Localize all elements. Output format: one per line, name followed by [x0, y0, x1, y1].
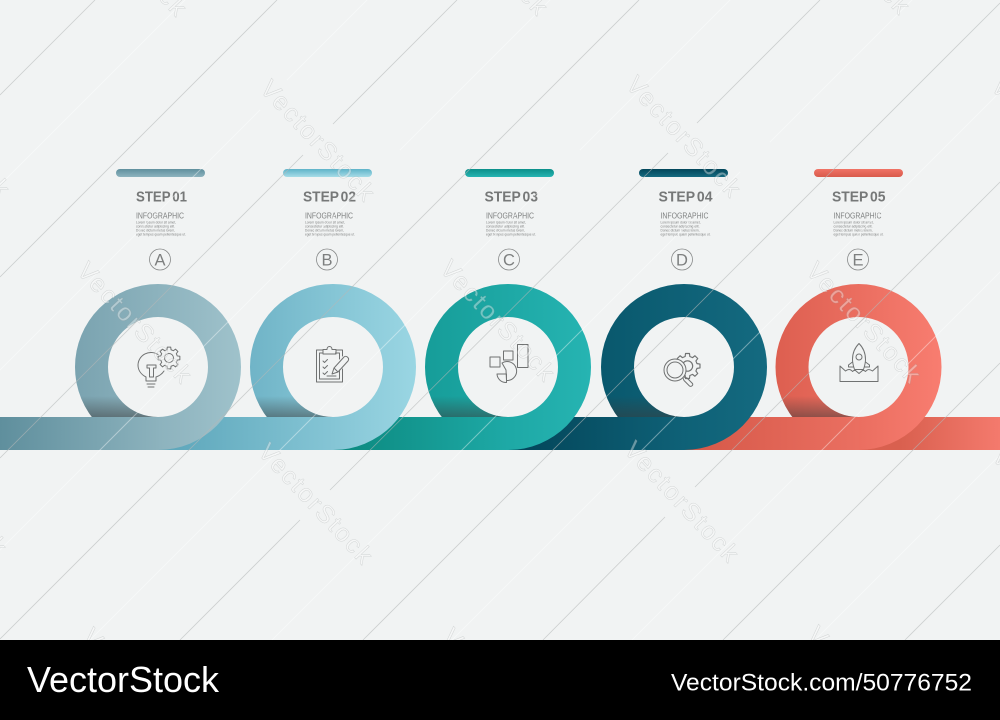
step 4 description: Lorem ipsum dolor sit amet,	[660, 220, 700, 224]
step 5 description	[834, 212, 884, 236]
step 1 description: consectetur adipiscing elit.	[136, 224, 175, 228]
footer bar	[0, 640, 1000, 720]
watermarks: VectorStock	[619, 436, 744, 568]
step 3 description: Donec dictum metus lorem,	[486, 228, 525, 232]
step 3 description: Lorem ipsum dolor sit amet,	[486, 220, 526, 224]
step 2 description: Lorem ipsum dolor sit amet,	[305, 220, 345, 224]
step 2 title: STEP 02	[303, 188, 356, 206]
icon: light bulb with gear	[138, 347, 180, 387]
step 1 ribbon and ring	[0, 284, 241, 450]
icon: rocket launch	[840, 344, 878, 382]
step 2 description: Donec dictum metus lorem,	[305, 228, 344, 232]
step 2 description: consectetur adipiscing elit.	[305, 224, 344, 228]
step 3 description	[486, 212, 536, 236]
step 1 description: Lorem ipsum dolor sit amet,	[136, 220, 176, 224]
color bar 5	[814, 169, 903, 177]
letter badge D: D	[676, 252, 688, 270]
icon: charts	[490, 344, 528, 383]
step 2 header	[283, 169, 372, 270]
step 1 description: Donec dictum metus lorem,	[136, 228, 175, 232]
step 1 title: STEP 01	[136, 188, 187, 206]
step 4 description: INFOGRAPHIC	[660, 212, 709, 220]
letter badge E: E	[852, 252, 864, 270]
color bar 1	[116, 169, 205, 177]
watermarks: VectorStock	[435, 255, 560, 387]
step 4 header	[639, 169, 728, 270]
step 3 title: STEP 03	[484, 188, 538, 206]
step 1 description: eget tempus quam pellentesque ut.	[136, 232, 186, 236]
step 4 description	[660, 212, 710, 236]
color bar 2	[283, 169, 372, 177]
step 3 ribbon and ring	[333, 284, 591, 450]
step 1 description	[136, 212, 186, 236]
footer brand: VectorStock	[27, 659, 220, 700]
step 5 description: Donec dictum metus lorem,	[834, 228, 872, 232]
step 2 description: eget tempus quam pellentesque ut.	[305, 232, 355, 236]
step 4 ribbon and ring	[508, 284, 767, 450]
step 5 ribbon and ring	[684, 284, 1000, 450]
step 3 description: consectetur adipiscing elit.	[486, 224, 525, 228]
watermarks: VectorStock	[253, 438, 378, 570]
step 3 description: eget tempus quam pellentesque ut.	[486, 232, 536, 236]
step 5 description: INFOGRAPHIC	[834, 212, 882, 220]
step 4 description: Donec dictum metus lorem,	[660, 228, 700, 232]
letter badge B: B	[321, 252, 333, 270]
letter badge A: A	[154, 252, 166, 270]
watermarks: VectorStock	[72, 257, 197, 389]
watermarks: VectorStock	[801, 257, 926, 389]
watermarks: VectorStock	[255, 75, 380, 207]
step 4 title: STEP 04	[658, 188, 713, 206]
step 4 description: consectetur adipiscing elit.	[660, 224, 700, 228]
watermarks: VectorStock	[621, 71, 746, 203]
footer image id: VectorStock.com/50776752	[671, 670, 972, 696]
step 1 header	[116, 169, 205, 270]
color bar 4	[639, 169, 728, 177]
step 2 description: INFOGRAPHIC	[305, 212, 353, 220]
step 3 description: INFOGRAPHIC	[486, 212, 534, 220]
step 5 description: Lorem ipsum dolor sit amet,	[834, 220, 874, 224]
icon: clipboard with pen	[316, 346, 349, 382]
step 4 description: eget tempus quam pellentesque ut.	[660, 232, 710, 236]
step 5 description: consectetur adipiscing elit.	[834, 224, 872, 228]
step 5 description: eget tempus quam pellentesque ut.	[834, 232, 884, 236]
color bar 3	[465, 169, 554, 177]
icon: magnifier with gear	[664, 354, 700, 386]
letter badge C: C	[503, 252, 515, 270]
step 1 description: INFOGRAPHIC	[136, 212, 184, 220]
step 5 title: STEP 05	[832, 188, 886, 206]
step 5 header	[814, 169, 903, 270]
step 2 description	[305, 212, 355, 236]
step 3 header	[465, 169, 554, 270]
step 2 ribbon and ring	[158, 284, 416, 450]
